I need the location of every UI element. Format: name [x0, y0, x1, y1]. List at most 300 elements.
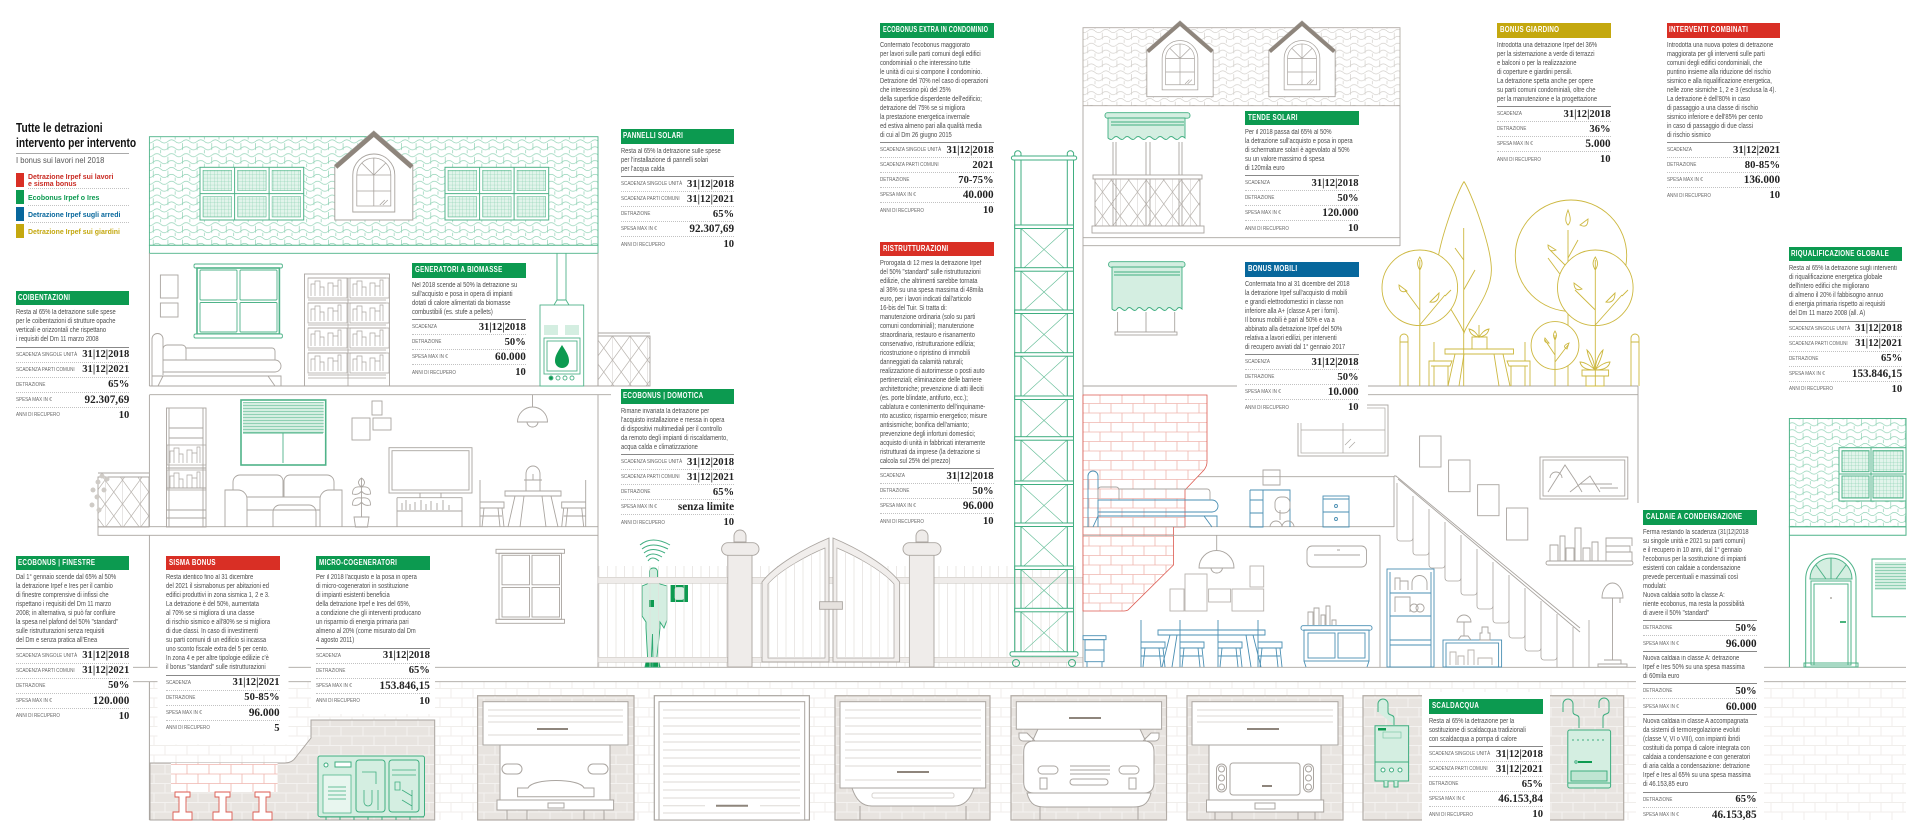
panel: ecobonus finestre: la detrazione Irpef e Ires per il cambio	[16, 583, 113, 590]
panel: scaldacqua: SCALDACQUA	[1432, 701, 1479, 710]
panel: bonus mobili: DETRAZIONE	[1245, 374, 1274, 380]
scaffold tower	[1010, 151, 1078, 667]
book shelf	[1546, 528, 1633, 565]
cypress tree	[1437, 182, 1491, 386]
pendant lamp	[518, 395, 548, 427]
panel: sisma bonus: del 2021 il sismabonus per abitazioni ed	[166, 583, 269, 590]
panel: caldaie a condensazione: DETRAZIONE	[1643, 625, 1672, 631]
gate	[762, 538, 900, 662]
panel: sisma bonus: di due classi. In caso di investimenti	[166, 628, 258, 635]
panel: bonus mobili: Il bonus mobili è pari al 50% e va a	[1245, 317, 1335, 324]
panel: pannelli solari: SCADENZA SINGOLE UNITÀ	[620, 181, 682, 187]
panel: bonus giardino: 36%	[1589, 124, 1611, 135]
panel: riqualificazione globale: dell'intero edifici che migliorano	[1789, 283, 1869, 290]
panel: micro-cogeneratori: a condizione che gli interventi producano	[316, 610, 421, 617]
garden	[1382, 182, 1639, 386]
panel: ecobonus domotica: 31|12|2021	[687, 472, 734, 483]
panel: generatori a biomasse: GENERATORI A BIOMASSE	[415, 265, 502, 274]
panel: bonus mobili: abbinato alla detrazione Irpef del 50%	[1245, 326, 1342, 333]
panel: caldaie a condensazione	[1643, 510, 1757, 823]
panel: coibentazioni: Resta al 65% la detrazione sulle spese	[16, 309, 115, 316]
panel: caldaie a condensazione: prevede percentuali e massimali così	[1643, 574, 1738, 581]
small tree branches	[1545, 331, 1569, 386]
panel: ecobonus finestre: SCADENZA SINGOLE UNITÀ	[16, 653, 77, 659]
panel: caldaie a condensazione: esistenti con caldaie a condensazione	[1643, 565, 1741, 572]
panel: coibentazioni: SPESA MAX IN €	[16, 397, 51, 403]
panel: bonus mobili	[1245, 262, 1359, 415]
panel: interventi combinati: comuni degli edifici condominiali, che	[1666, 60, 1762, 67]
panel: caldaie a condensazione: l'ecobonus per la sostituzione di impianti	[1643, 556, 1746, 563]
panel: riqualificazione globale: DETRAZIONE	[1789, 356, 1818, 362]
panel: caldaie a condensazione: caldaia a condensazione e con generatori	[1643, 754, 1750, 761]
panel: coibentazioni: 31|12|2021	[82, 364, 129, 375]
title: Tutte le detrazioni	[16, 121, 102, 135]
panel: ristrutturazioni: al 36% su una spesa massima di 48mila	[880, 287, 983, 294]
panel: caldaie a condensazione: SPESA MAX IN €	[1643, 704, 1679, 710]
right small building	[1789, 418, 1906, 667]
panel: micro-cogeneratori: 31|12|2018	[383, 650, 430, 661]
subtitle: I bonus sui lavori nel 2018	[16, 156, 104, 164]
panel: ecobonus extra in condominio: ed estiva almeno pari alla qualità media	[880, 123, 982, 130]
panel: micro-cogeneratori: almeno al 20% (come misurato dal Dm	[316, 628, 416, 635]
panel: riqualificazione globale: Resta al 65% la detrazione sugli interventi	[1789, 265, 1896, 272]
television	[389, 448, 472, 527]
panel: bonus giardino: su parti comuni condominiali, oltre che	[1497, 87, 1595, 94]
panel: ristrutturazioni: del 50% "standard" sulle ristrutturazioni	[880, 269, 981, 276]
panel: coibentazioni: SCADENZA SINGOLE UNITÀ	[16, 352, 77, 358]
panel: pannelli solari: Resta al 65% la detrazione sulle spese	[620, 148, 720, 155]
closed garage	[654, 696, 809, 820]
air conditioner	[1307, 546, 1366, 567]
panel: ristrutturazioni: RISTRUTTURAZIONI	[882, 244, 948, 253]
panel: bonus giardino: SPESA MAX IN €	[1497, 141, 1533, 147]
panel: scaldacqua: SCADENZA PARTI COMUNI	[1429, 766, 1488, 772]
panel: bonus giardino: La detrazione spetta anche per opere	[1497, 78, 1593, 85]
panel: micro-cogeneratori: 4 agosto 2011)	[316, 637, 354, 644]
blue bed	[1088, 471, 1218, 527]
wifi waves	[640, 540, 670, 561]
panel: bonus mobili: relativa a lavori edilizi, per interventi	[1245, 335, 1337, 342]
panel: caldaie a condensazione: DETRAZIONE	[1643, 688, 1672, 694]
panel: bonus mobili: 10.000	[1328, 386, 1359, 398]
potted plant	[352, 478, 370, 527]
panel: ristrutturazioni: (es. porte blindate, antifurto, ecc.);	[880, 395, 968, 402]
arched door	[1804, 554, 1858, 667]
panel: bonus giardino: ANNI DI RECUPERO	[1497, 157, 1541, 163]
panel: sisma bonus	[166, 556, 280, 736]
legend: arredi	[16, 207, 129, 223]
panel: caldaie a condensazione: 60.000	[1726, 701, 1757, 713]
panel: micro-cogeneratori: un risparmio di energia primaria pari	[316, 619, 409, 626]
dormer	[335, 131, 413, 220]
panel: ristrutturazioni: edilizie, che altrimenti sarebbe tornata	[880, 278, 977, 285]
panel: generatori a biomasse	[412, 263, 526, 380]
panel: sisma bonus: ANNI DI RECUPERO	[166, 725, 210, 731]
panel: sisma bonus: al 70% se si migliora di una classe	[166, 610, 254, 617]
panel: ecobonus domotica: 10	[724, 517, 734, 528]
panel: riqualificazione globale: del Dm 11 marzo 2008 (all. A)	[1789, 310, 1865, 317]
gray picture window	[1298, 405, 1388, 456]
tall bookshelf	[166, 408, 206, 527]
panel: ecobonus extra in condominio: SCADENZA PARTI COMUNI	[880, 162, 939, 168]
panel: interventi combinati: 80-85%	[1745, 160, 1780, 171]
panel: pannelli solari: 65%	[713, 209, 734, 220]
roof solar panels	[1839, 448, 1906, 501]
panel: caldaie a condensazione: Nuova caldaia in classe A accompagnata	[1643, 718, 1748, 725]
panel: ristrutturazioni: cablatura e contenimento dell'inquiname-	[880, 404, 985, 411]
panel: micro-cogeneratori: ANNI DI RECUPERO	[316, 698, 360, 704]
blue study desk	[1250, 470, 1294, 527]
panel: micro-cogeneratori: 153.846,15	[380, 680, 430, 692]
legend: ecobonus	[16, 190, 129, 206]
panel: ecobonus finestre: DETRAZIONE	[16, 683, 45, 689]
panel: bonus mobili: 31|12|2018	[1312, 357, 1359, 368]
panel: ecobonus finestre: ANNI DI RECUPERO	[16, 713, 60, 719]
panel: micro-cogeneratori: della detrazione Irpef e Ires del 65%,	[316, 601, 411, 608]
title	[16, 121, 136, 150]
panel: coibentazioni: 10	[119, 410, 129, 421]
panel: ecobonus finestre: SCADENZA PARTI COMUNI	[16, 668, 74, 674]
panel: tende solari: 31|12|2018	[1312, 178, 1359, 189]
panel: caldaie a condensazione: 50%	[1735, 686, 1757, 697]
panel: ecobonus extra in condominio	[880, 23, 994, 218]
panel: interventi combinati: DETRAZIONE	[1666, 162, 1696, 168]
panel: ristrutturazioni	[880, 242, 994, 529]
panel: caldaie a condensazione: 65%	[1735, 794, 1757, 805]
panel: ecobonus finestre: rispettano i requisiti del Dm 11 marzo	[16, 601, 111, 608]
panel: sisma bonus: edifici produttivi in zona sismica 1, 2 e 3.	[166, 592, 270, 599]
panel: ecobonus domotica	[620, 389, 734, 530]
panel: ecobonus domotica: di dispositivi multimediali per il controllo	[620, 426, 722, 433]
panel: interventi combinati: nelle zone sismiche 1, 2 e 3 (esclusa la 4).	[1666, 87, 1776, 94]
panel: riqualificazione globale: 10	[1892, 384, 1902, 395]
legend: lavori: e sisma bonus	[28, 179, 77, 188]
panel: riqualificazione globale: di riqualificazione energetica globale	[1789, 274, 1882, 281]
panel: ecobonus domotica: da remoto degli impianti di riscaldamento,	[620, 435, 727, 442]
panel: bonus giardino: DETRAZIONE	[1497, 126, 1526, 132]
panel: ristrutturazioni: comuni condominiali); manutenzione	[880, 323, 974, 330]
panel: interventi combinati: SPESA MAX IN €	[1666, 177, 1702, 183]
panel: ecobonus finestre: la spesa nel plafond del 50% "standard"	[16, 619, 118, 626]
small blue cabinet	[1323, 496, 1349, 527]
panel: ecobonus finestre: 10	[119, 711, 129, 722]
panel: micro-cogeneratori	[316, 556, 430, 709]
panel: caldaie a condensazione: da sistemi di termoregolazione evoluti	[1643, 727, 1740, 734]
car	[1019, 729, 1159, 820]
panel: caldaie a condensazione: niente ecobonus, ma resta la possibilità	[1643, 601, 1744, 608]
panel: tende solari: TENDE SOLARI	[1248, 113, 1297, 122]
panel: caldaie a condensazione: DETRAZIONE	[1643, 797, 1672, 803]
panel: micro-cogeneratori: 10	[419, 696, 430, 707]
branches right	[1574, 257, 1628, 386]
right balcony	[598, 333, 650, 386]
hanging lamp	[1199, 535, 1234, 573]
left building	[90, 131, 650, 667]
panel: ecobonus finestre: SPESA MAX IN €	[16, 698, 51, 704]
panel: scaldacqua: SPESA MAX IN €	[1429, 796, 1465, 802]
panel: ecobonus finestre: del Dm e senza pratica all'Enea	[16, 637, 97, 644]
panel: ecobonus domotica: SCADENZA PARTI COMUNI	[620, 474, 679, 480]
panel: caldaie a condensazione: 96.000	[1726, 638, 1757, 650]
balcony	[1092, 142, 1204, 233]
panel: caldaie a condensazione: modulati:	[1643, 583, 1666, 590]
panel: tende solari: 50%	[1337, 193, 1359, 204]
wifi sensor and man	[640, 540, 688, 667]
man	[642, 568, 667, 667]
panel: coibentazioni: per le coibentazioni di strutture opache	[16, 318, 115, 325]
garden table	[1429, 342, 1530, 386]
panel: ecobonus finestre: di finestre comprensive di infissi che	[16, 592, 108, 599]
panel: sisma bonus: SISMA BONUS	[168, 558, 215, 567]
gate post right	[903, 530, 941, 667]
panel: interventi combinati: Introdotta una nuova ipotesi di detrazione	[1666, 42, 1773, 49]
panel: interventi combinati: puntino insieme alla riduzione del rischio	[1666, 69, 1770, 76]
panel: ecobonus finestre: 50%	[108, 680, 129, 691]
panel: ecobonus domotica: 31|12|2018	[687, 457, 734, 468]
panel: ristrutturazioni: conservativo, ristrutturazione edilizia;	[880, 341, 975, 348]
panel: sisma bonus: Resta identico fino al 31 dicembre	[166, 574, 253, 581]
panel: caldaie a condensazione: costituiti da pompa di calore integrata con	[1643, 745, 1750, 752]
panel: bonus mobili: SPESA MAX IN €	[1245, 389, 1281, 395]
panel: ecobonus extra in condominio: condominiali o che interessino tutte	[880, 60, 970, 67]
left basement cutaway	[149, 682, 435, 820]
panel: pannelli solari: PANNELLI SOLARI	[623, 131, 683, 140]
panel: ristrutturazioni: prevenzione degli infortuni domestici;	[880, 431, 975, 438]
panel: bonus mobili: la detrazione Irpef sull'acquisto di mobili	[1245, 290, 1347, 297]
panel: ristrutturazioni: calcola sul 25% del prezzo)	[880, 458, 950, 465]
panel: ecobonus domotica: acqua calda e climatizzazione	[620, 444, 697, 451]
solar panels right	[445, 167, 549, 220]
panel: ristrutturazioni: DETRAZIONE	[880, 488, 909, 494]
branches left	[1399, 257, 1451, 386]
panel: interventi combinati: 31|12|2021	[1733, 145, 1780, 156]
panel: ecobonus finestre: Dal 1° gennaio scende dal 65% al 50%	[16, 574, 116, 581]
panel: generatori a biomasse: sull'acquisto e posa in opera di impianti	[412, 291, 513, 298]
panel: scaldacqua: 46.153,84	[1498, 793, 1543, 805]
legend: lavori	[16, 172, 129, 189]
panel: generatori a biomasse: Nel 2018 scende al 50% la detrazione su	[412, 282, 517, 289]
truck shutter	[1192, 702, 1338, 745]
panel: ecobonus extra in condominio: le unità di cui si compone il condominio.	[880, 69, 982, 76]
panel: scaldacqua: sostituzione di scaldacqua tradizionali	[1429, 727, 1526, 734]
fence and gate	[598, 530, 1083, 667]
panel: coibentazioni: DETRAZIONE	[16, 382, 45, 388]
panel: ristrutturazioni: pertinenziali; eliminazione delle barriere	[880, 377, 982, 384]
panel: sisma bonus: il bonus "standard" sulle ristrutturazioni	[166, 664, 266, 671]
panel: ecobonus extra in condominio: 40.000	[963, 189, 994, 201]
dining table	[480, 466, 586, 527]
legend: ecobonus: Ecobonus Irpef o Ires	[28, 193, 100, 202]
panel: scaldacqua: Resta al 65% la detrazione per la	[1429, 718, 1515, 725]
small round tree	[1531, 322, 1579, 369]
panel: tende solari: ANNI DI RECUPERO	[1245, 226, 1289, 232]
mountain picture	[1540, 457, 1628, 499]
panel: interventi combinati: ANNI DI RECUPERO	[1666, 193, 1710, 199]
panel: pannelli solari: per l'installazione di pannelli solari	[620, 157, 708, 164]
panel: pannelli solari: 31|12|2018	[687, 179, 734, 190]
panel: coibentazioni: 31|12|2018	[82, 349, 129, 360]
panel: caldaie a condensazione: 50%	[1735, 623, 1757, 634]
panel: tende solari: di 120mila euro	[1245, 165, 1285, 172]
panel: coibentazioni: verticali e orizzontali che rispettano	[16, 327, 106, 334]
panel: coibentazioni	[16, 291, 129, 423]
panel: riqualificazione globale: RIQUALIFICAZIONE GLOBALE	[1791, 249, 1889, 258]
ground floor window	[496, 549, 564, 623]
panel: scaldacqua: 31|12|2018	[1496, 749, 1543, 760]
panel: ecobonus extra in condominio: 31|12|2018	[947, 145, 994, 156]
panel: ecobonus finestre: 31|12|2018	[82, 650, 129, 661]
car shutter	[1016, 702, 1162, 729]
panel: ecobonus extra in condominio: detrazione del 75% se si migliora	[880, 105, 965, 112]
panel: coibentazioni: 65%	[108, 379, 129, 390]
van garage	[478, 696, 634, 820]
panel: tende solari: di schermature solari è agevolato al 50%	[1245, 147, 1350, 154]
panel: tende solari: la detrazione sull'acquisto e posa in opera	[1245, 138, 1353, 145]
panel: generatori a biomasse: dotati di calore alimentati da biomasse	[412, 300, 511, 307]
panel: tende solari: 10	[1348, 223, 1359, 234]
van shutter	[483, 702, 628, 745]
panel: sisma bonus: di rischio sismico e all'80% se si migliora	[166, 619, 270, 626]
panel: ristrutturazioni: antisismiche; bonifica dell'amianto;	[880, 422, 969, 429]
panel: sisma bonus: La detrazione è del 50%, aumentata	[166, 601, 259, 608]
panel: ecobonus finestre: sulle ristrutturazioni senza requisiti	[16, 628, 104, 635]
panel: ecobonus extra in condominio: ANNI DI RECUPERO	[880, 208, 924, 214]
panel: ecobonus extra in condominio: ECOBONUS EXTRA IN CONDOMINIO	[882, 25, 988, 34]
bed	[152, 334, 281, 386]
scaffold bars	[1010, 151, 1078, 667]
panel: tende solari: su un valore massimo di spesa	[1245, 156, 1324, 163]
blue sideboard	[1301, 606, 1372, 667]
central building	[1083, 21, 1638, 667]
panel: caldaie a condensazione: e il recupero in 10 anni, dal 1° gennaio	[1643, 547, 1742, 554]
panel: ristrutturazioni: 16-bis del Tuir. Si tratta di:	[880, 305, 947, 312]
legend: lavori: Detrazione Irpef sui lavori	[28, 172, 113, 181]
panel: sisma bonus: 50-85%	[244, 692, 280, 703]
panel: ecobonus domotica: DETRAZIONE	[620, 489, 650, 495]
panel: micro-cogeneratori: di impianti esistenti beneficia	[316, 592, 390, 599]
panel: interventi combinati	[1666, 23, 1780, 203]
panel: bonus mobili: Confermata fino al 31 dicembre del 2018	[1245, 281, 1350, 288]
panel: bonus mobili: 10	[1348, 402, 1359, 413]
panel: micro-cogeneratori: DETRAZIONE	[316, 668, 346, 674]
panel: ecobonus extra in condominio: DETRAZIONE	[880, 177, 909, 183]
panel: riqualificazione globale	[1789, 247, 1902, 397]
panel: generatori a biomasse: 31|12|2018	[479, 322, 526, 333]
round tree right	[1558, 250, 1633, 326]
panel: caldaie a condensazione: 46.153,85	[1712, 809, 1757, 821]
stair pictures	[1420, 436, 1528, 540]
panel: caldaie a condensazione: di avere il 50% "standard"	[1643, 610, 1709, 617]
panel: ecobonus extra in condominio: della superficie disperdente dell'edificio;	[880, 96, 982, 103]
panel: bonus mobili: inferiore alla A+ (classe A per i forni).	[1245, 308, 1339, 315]
panel: ecobonus domotica: SPESA MAX IN €	[620, 504, 656, 510]
panel: pannelli solari: per l'acqua calda	[620, 166, 664, 173]
panel: bonus giardino: Introdotta una detrazione Irpef del 36%	[1497, 42, 1597, 49]
panel: generatori a biomasse: 60.000	[495, 351, 526, 363]
panel: ecobonus extra in condominio: 70-75%	[958, 175, 994, 186]
panel: pannelli solari: ANNI DI RECUPERO	[620, 242, 664, 248]
panel: scaldacqua: 31|12|2021	[1496, 764, 1543, 775]
panel: interventi combinati: 10	[1770, 190, 1780, 201]
dormer two	[1269, 21, 1335, 97]
panel: pannelli solari: 31|12|2021	[687, 194, 734, 205]
panel: micro-cogeneratori: di micro-cogeneratori in sostituzione	[316, 583, 409, 590]
ground lines	[133, 667, 1906, 682]
panel: caldaie a condensazione: di 46.153,85 euro	[1643, 781, 1688, 788]
floor lamp	[1598, 583, 1627, 667]
panel: sisma bonus: 31|12|2021	[233, 677, 280, 688]
truck	[1206, 745, 1324, 820]
green roof	[1789, 418, 1906, 527]
fence slats	[598, 566, 1083, 667]
basement brick wall	[150, 682, 1906, 820]
wall pictures lower	[1170, 566, 1264, 611]
second floor slab and balcony	[90, 473, 598, 535]
panel: bonus giardino: BONUS GIARDINO	[1500, 25, 1559, 34]
panel: ristrutturazioni: straordinaria, restauro e risanamento	[880, 332, 975, 339]
panel: micro-cogeneratori: SCADENZA	[316, 653, 341, 659]
panel: sisma bonus: 96.000	[249, 707, 280, 719]
panel: pannelli solari	[620, 129, 734, 252]
panel: tende solari: SCADENZA	[1245, 180, 1270, 186]
panel: riqualificazione globale: 153.846,15	[1852, 368, 1902, 380]
panel: pannelli solari: SPESA MAX IN €	[620, 226, 656, 232]
panel: riqualificazione globale: SPESA MAX IN €	[1789, 371, 1824, 377]
panel: ecobonus domotica: SCADENZA SINGOLE UNITÀ	[620, 459, 682, 465]
scaffold frame	[1015, 160, 1074, 652]
panel: interventi combinati: La detrazione è dell'80% in caso	[1666, 96, 1750, 103]
panel: interventi combinati: sismico inferiore e dell'85% per cento	[1666, 114, 1762, 121]
panel: tende solari: SPESA MAX IN €	[1245, 210, 1281, 216]
panel: caldaie a condensazione: Nuova caldaia sotto la classe A:	[1643, 592, 1725, 599]
band and wall	[1789, 527, 1906, 667]
panel: ecobonus extra in condominio: di cui al Dm 26 giugno 2015	[880, 132, 952, 139]
gate post left	[722, 530, 759, 667]
panel: ristrutturazioni: ricostruzione o ripristino di immobili	[880, 350, 970, 357]
panel: caldaie a condensazione: Irpef e Ires 50% su una spesa massima	[1643, 664, 1745, 671]
solar panels left	[200, 167, 304, 220]
legend: arredi: Detrazione Irpef sugli arredi	[28, 210, 120, 219]
panel: riqualificazione globale: di energia primaria rispetto ai requisiti	[1789, 301, 1885, 308]
panel: ecobonus extra in condominio: SPESA MAX IN €	[880, 192, 916, 198]
panel: bonus mobili: SCADENZA	[1245, 359, 1270, 365]
panel: tende solari: DETRAZIONE	[1245, 195, 1274, 201]
panel: caldaie a condensazione: su singole unità e 2021 su parti comuni)	[1643, 538, 1745, 545]
panel: ristrutturazioni: realizzazione di autorimesse o posti auto	[880, 368, 985, 375]
panel: ecobonus extra in condominio: la prestazione energetica invernale	[880, 114, 970, 121]
walls and floors	[149, 253, 611, 667]
panel: interventi combinati: di rischio sismico	[1666, 132, 1710, 139]
panel: caldaie a condensazione: SPESA MAX IN €	[1643, 812, 1679, 818]
blue table and lamp	[1443, 615, 1502, 667]
panel: scaldacqua: 10	[1532, 809, 1543, 820]
panel: ecobonus finestre: ECOBONUS | FINESTRE	[18, 558, 96, 567]
truck garage	[1187, 696, 1343, 820]
panel: ecobonus domotica: ANNI DI RECUPERO	[620, 520, 664, 526]
panel: riqualificazione globale: SCADENZA SINGOLE UNITÀ	[1789, 326, 1850, 332]
red foundation	[171, 763, 278, 820]
red brick wall	[1083, 395, 1207, 611]
legend: giardini	[16, 224, 120, 238]
green window with shutter	[241, 400, 326, 465]
panel: sisma bonus: SCADENZA	[166, 680, 191, 686]
panel: generatori a biomasse: 10	[515, 367, 526, 378]
panel: scaldacqua: 65%	[1522, 779, 1543, 790]
panel: ristrutturazioni: Prorogata di 12 mesi la detrazione Irpef	[880, 260, 981, 267]
panel: bonus mobili: BONUS MOBILI	[1248, 264, 1297, 273]
panel: bonus giardino: e balconi o per la realizzazione	[1497, 60, 1576, 67]
boiler	[540, 253, 584, 386]
